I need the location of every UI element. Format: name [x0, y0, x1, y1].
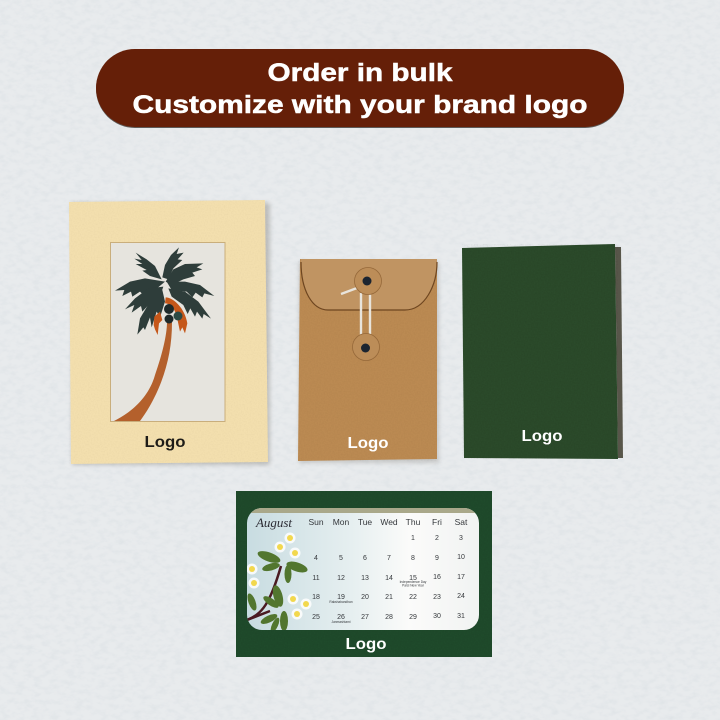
calendar dates: 30 — [433, 613, 441, 620]
month name: August — [255, 515, 292, 530]
calendar dates: 17 — [457, 574, 465, 581]
calendar dates: 12 — [337, 575, 345, 582]
calendar dates: 13 — [361, 575, 369, 582]
holiday notes — [329, 580, 427, 624]
icon: palm tree — [114, 247, 214, 421]
top button — [354, 268, 382, 294]
calendar window — [246, 508, 479, 634]
holiday notes: Independence Day — [400, 580, 427, 584]
logo label: Logo — [144, 434, 186, 451]
calendar dates: 20 — [361, 594, 369, 601]
weekday header: Fri — [432, 517, 442, 527]
calendar dates: 28 — [385, 614, 393, 621]
calendar dates: 16 — [433, 574, 441, 581]
holiday notes: Janmashtami — [332, 620, 351, 624]
calendar dates: 3 — [459, 535, 463, 542]
weekday header: Sat — [455, 517, 468, 527]
calendar dates: 23 — [433, 594, 441, 601]
palm coconuts — [164, 304, 182, 324]
logo label: Logo — [346, 636, 386, 653]
weekday header: Mon — [333, 517, 350, 527]
product: green card stack — [462, 244, 623, 459]
logo label: Logo — [348, 435, 388, 452]
calendar dates — [312, 535, 465, 621]
title banner — [96, 49, 624, 128]
calendar dates: 27 — [361, 614, 369, 621]
bottom button — [352, 334, 380, 360]
weekday header: Tue — [358, 517, 372, 527]
weekday header — [308, 519, 468, 525]
calendar dates: 6 — [363, 555, 367, 562]
product: desk calendar in green frame — [236, 491, 492, 657]
calendar dates: 7 — [387, 555, 391, 562]
string ties — [341, 288, 370, 335]
floral illustration — [246, 532, 312, 634]
card window — [110, 242, 225, 422]
calendar dates: 9 — [435, 555, 439, 562]
calendar dates: 31 — [457, 613, 465, 620]
heading line 1: Order in bulk — [268, 59, 453, 87]
calendar dates: 10 — [457, 554, 465, 561]
calendar dates: 21 — [385, 594, 393, 601]
palm trunk — [114, 322, 172, 421]
calendar dates: 5 — [339, 555, 343, 562]
holiday notes: Rakshabandhan — [329, 600, 353, 604]
calendar dates: 18 — [312, 594, 320, 601]
heading line 2: Customize with your brand logo — [132, 91, 588, 119]
palm fronds — [115, 247, 214, 335]
logo label: Logo — [522, 428, 562, 445]
calendar dates: 1 — [411, 535, 415, 542]
calendar dates: 29 — [409, 614, 417, 621]
product: kraft envelope — [298, 259, 439, 463]
calendar dates: 26 — [337, 614, 345, 621]
calendar dates: 22 — [409, 594, 417, 601]
calendar dates: 14 — [385, 575, 393, 582]
weekday header: Thu — [406, 517, 421, 527]
calendar dates: 19 — [337, 594, 345, 601]
weekday header: Sun — [308, 517, 324, 527]
weekday header: Wed — [380, 517, 398, 527]
envelope flap — [301, 259, 437, 310]
calendar dates: 8 — [411, 555, 415, 562]
palm inflorescence — [154, 297, 187, 335]
calendar dates: 11 — [312, 575, 320, 582]
calendar dates: 4 — [314, 555, 318, 562]
product: cream palm tree card — [69, 200, 270, 465]
holiday notes: Parsi New Year — [402, 584, 425, 588]
calendar dates: 24 — [457, 593, 465, 600]
calendar dates: 2 — [435, 535, 439, 542]
calendar dates: 25 — [312, 614, 320, 621]
calendar dates: 15 — [409, 575, 417, 582]
